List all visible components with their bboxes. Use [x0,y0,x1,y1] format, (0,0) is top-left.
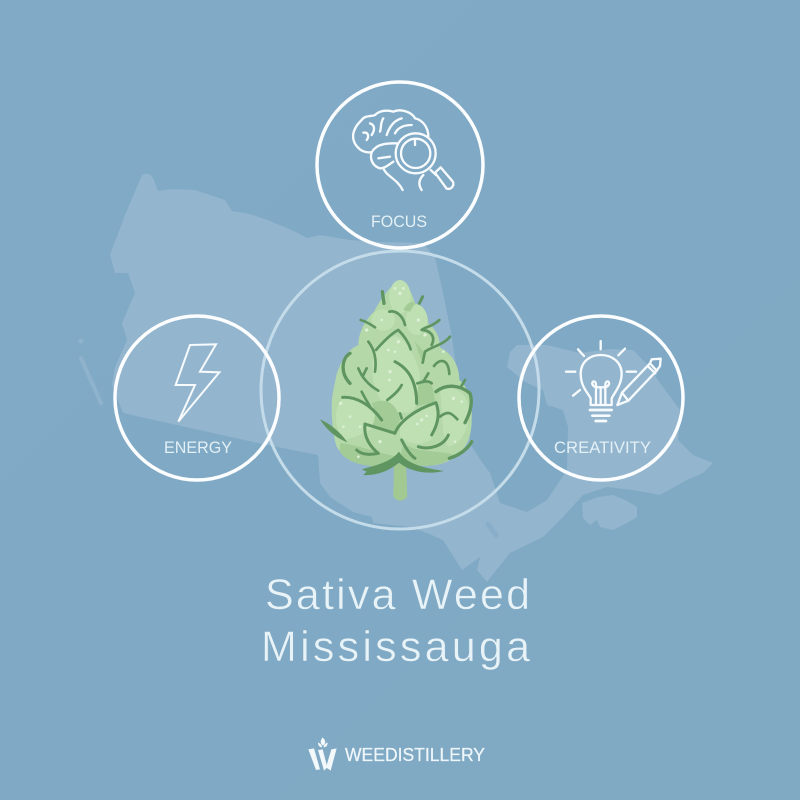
logo: Weedistillery [308,737,485,771]
bud stem [393,463,407,501]
title: Mississauga [261,623,530,671]
panel: focus [317,82,483,248]
icon: lightning bolt [176,344,219,422]
icon: light bulb and pencil [566,341,661,421]
label: creativity: CREATIVITY [554,439,651,457]
center ring [261,251,539,529]
icon: cannabis bud [320,280,472,501]
bud body [332,280,472,467]
icon: brain with magnifying glass [353,110,453,190]
panel: energy [115,316,279,480]
panel: creativity [519,316,683,480]
icon: logo mark [308,737,337,771]
title [261,571,530,671]
label: focus: FOCUS [371,213,427,231]
title: Sativa Weed [265,571,530,619]
bud veins [343,292,472,458]
map: Ontario silhouette [78,174,713,582]
bud lower leaves [320,419,444,475]
bud speckles [339,287,463,458]
logo wordmark: WEEDISTILLERY [345,745,485,765]
label: energy: ENERGY [164,439,232,457]
bud light lobes [336,280,469,447]
bud shaded lobes [340,302,455,467]
